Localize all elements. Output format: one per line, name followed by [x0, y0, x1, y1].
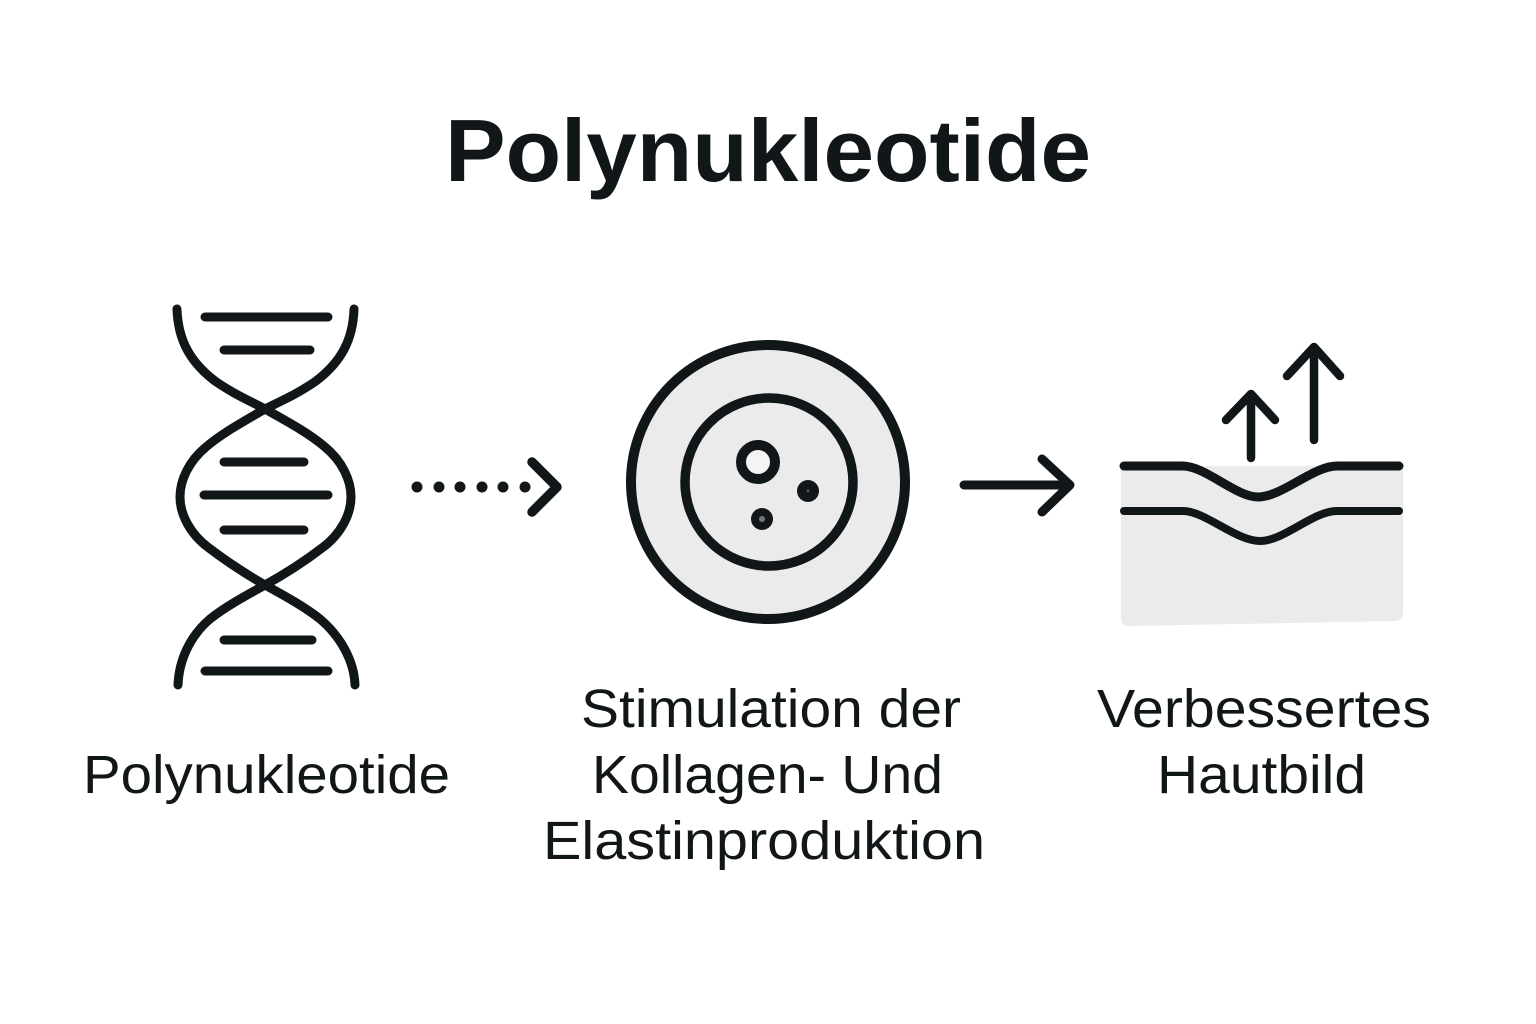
arrow: solid arrow to skin	[964, 459, 1070, 512]
label: improved skin: Hautbild	[1157, 745, 1366, 805]
label: Polynukleotide: Polynukleotide	[83, 745, 450, 805]
icon: cell with nucleus	[631, 345, 905, 619]
label: improved skin: Verbessertes	[1097, 679, 1431, 739]
label: Stimulation: Kollagen- Und	[592, 745, 943, 805]
arrow: dotted arrow to cell	[412, 462, 557, 512]
label: Stimulation: Stimulation der	[581, 679, 961, 739]
title: Polynukleotide	[445, 101, 1091, 200]
label: improved skin	[1097, 679, 1431, 805]
label: Stimulation: Elastinproduktion	[543, 811, 985, 871]
label: Stimulation	[543, 679, 985, 871]
icon: skin layers with upward arrows	[1121, 347, 1403, 626]
icon: DNA double helix	[177, 309, 355, 685]
